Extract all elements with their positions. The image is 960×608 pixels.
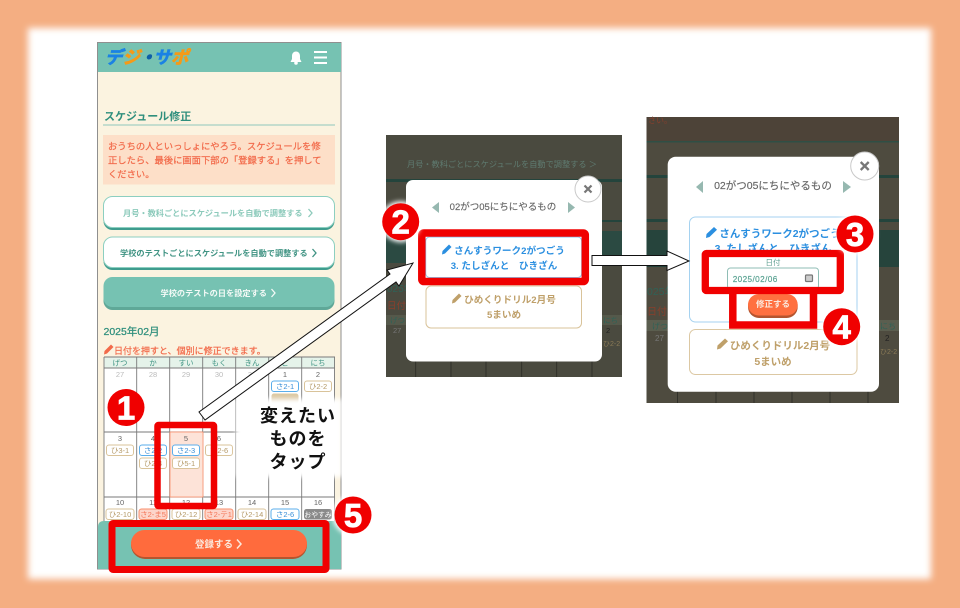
dimmed screenshot: にち — [880, 322, 896, 331]
week 3: さ2-テ1 — [206, 510, 232, 519]
notice box: ください。 — [108, 170, 154, 180]
callout: tap what you want to change: ものを — [270, 429, 326, 449]
week 3: 13 — [215, 498, 223, 507]
week 3: 12 — [182, 498, 190, 507]
week 2: ひ2-6 — [210, 446, 228, 455]
footer bar — [98, 521, 341, 569]
callout: tap what you want to change: 変えたい — [260, 406, 336, 426]
week 1: 31 — [248, 370, 256, 379]
dimmed screenshot: げつ — [652, 322, 668, 331]
icon: menu — [314, 51, 327, 64]
week 2: さ2-2 — [144, 446, 162, 455]
week 1: 2 — [316, 370, 320, 379]
card: daily drill: 5まいめ — [754, 356, 792, 368]
card: math workbook — [426, 237, 582, 278]
week 3: 15 — [281, 498, 289, 507]
button: set test date: 学校のテストの日を設定する — [160, 288, 267, 298]
arrow: calendar to modal — [199, 263, 413, 420]
step marker 4 — [821, 306, 862, 347]
date input: 2025/02/06 — [733, 275, 778, 284]
highlight: date input — [705, 254, 840, 290]
step marker 4: 4 — [833, 309, 852, 346]
panel: modal steps 3 and 4 — [646, 116, 899, 403]
week 2: さ2-3 — [177, 446, 195, 455]
app logo: デジ・サポ — [104, 47, 193, 67]
heading: schedule edit: スケジュール修正 — [104, 109, 191, 123]
week 2: 5 — [184, 434, 188, 443]
button: register: 登録する — [195, 538, 233, 550]
highlight: date cell — [158, 425, 214, 506]
phone body — [98, 42, 341, 569]
highlight: math card — [422, 233, 585, 282]
button: register — [131, 530, 307, 559]
week 1: ひ2-2 — [309, 382, 327, 391]
card: math workbook: さんすうワーク2がつごう — [454, 245, 565, 257]
card: math workbook expanded — [690, 217, 857, 322]
dimmed screenshot — [646, 116, 899, 403]
month label: 2025年02月 — [104, 325, 160, 338]
calendar — [104, 357, 335, 521]
dimmed screenshot: ひ2-2 — [880, 348, 897, 356]
selected day highlight — [170, 432, 203, 497]
date navigation: 02がつ05にちにやるもの — [450, 201, 556, 213]
weekday header — [104, 357, 335, 368]
week 3: 14 — [248, 498, 256, 507]
week 3: ひ2-10 — [109, 510, 131, 519]
week 1: 29 — [182, 370, 190, 379]
date field label: 日付 — [766, 257, 781, 267]
highlight: save button — [733, 290, 814, 325]
step marker 2: 2 — [392, 204, 410, 241]
week 1: さ2-1 — [276, 382, 294, 391]
dimmed screenshot: にち — [603, 316, 618, 325]
dimmed screenshot: 日付 — [647, 305, 667, 318]
dimmed screenshot — [386, 135, 622, 377]
weekday header: すい — [178, 358, 194, 368]
week 1: 1 — [283, 370, 287, 379]
week 3 — [106, 498, 332, 520]
week 2: 3 — [118, 434, 122, 443]
card: math workbook expanded: 3. たしざんと ひきざん — [715, 242, 832, 255]
week 1: 27 — [116, 370, 124, 379]
week 2: ひ3-1 — [111, 446, 129, 455]
step marker 3: 3 — [846, 216, 864, 253]
dimmed screenshot: 2 — [885, 334, 890, 343]
button: adjust by school test: 学校のテストごとにスケジュールを自動で調整する — [120, 248, 308, 258]
week 2: ひ5-1 — [177, 459, 195, 468]
week 1: 30 — [215, 370, 223, 379]
week 2 — [106, 434, 232, 468]
button: adjust by month and subject — [104, 196, 334, 230]
close button — [575, 176, 601, 202]
step marker 2 — [380, 201, 421, 242]
button: adjust by month and subject: 月号・教科ごとにスケジュールを自動で調整する — [123, 208, 303, 218]
date navigation — [432, 201, 575, 213]
week 1: 28 — [149, 370, 157, 379]
date navigation: 02がつ05にちにやるもの — [714, 179, 832, 192]
dimmed screenshot: 27 — [393, 326, 401, 335]
week 3: さ2-ま5 — [140, 510, 166, 519]
card: daily drill: ひめくりドリル2月号 — [730, 340, 830, 352]
dimmed screenshot: 2 — [606, 326, 610, 335]
modal card — [668, 157, 879, 392]
arrow: modal to edit form — [592, 251, 689, 270]
dimmed screenshot: 日付 — [387, 301, 407, 312]
step marker 1 — [108, 389, 144, 426]
week 2: 4 — [151, 434, 155, 443]
week 2: ひ2-4 — [144, 459, 162, 468]
week 3: 16 — [314, 498, 322, 507]
card: math workbook: 3. たしざんと ひきざん — [451, 260, 558, 272]
dimmed screenshot: 月号・教科ごとにスケジュールを自動で調整する ＞ — [407, 159, 597, 169]
button: save edit: 修正する — [756, 299, 790, 309]
notice box — [103, 135, 335, 184]
icon: bell — [290, 52, 302, 65]
close button — [851, 152, 879, 180]
step marker 5: 5 — [344, 497, 362, 534]
dimmed screenshot: 27 — [655, 334, 664, 343]
week 3: ひ2-14 — [241, 510, 263, 519]
callout: tap what you want to change — [236, 399, 342, 477]
weekday header: か — [149, 358, 157, 368]
date input — [728, 268, 818, 289]
step marker 5 — [332, 494, 374, 536]
highlight: register button — [112, 524, 326, 570]
dimmed screenshot: さい。 — [648, 116, 672, 125]
card: daily drill — [426, 286, 582, 328]
button: set test date — [104, 277, 334, 310]
weekday header: ど — [281, 358, 289, 368]
button: save edit — [748, 294, 798, 318]
weekday header: もく — [212, 358, 226, 368]
app header bar — [98, 43, 341, 72]
week 3: 10 — [116, 498, 124, 507]
week 2: 6 — [217, 434, 221, 443]
dimmed screenshot: 025年 — [387, 282, 414, 295]
weekday header: きん — [244, 358, 260, 368]
card: math workbook expanded: さんすうワーク2がつごう — [719, 227, 841, 240]
weekday header: にち — [310, 358, 326, 368]
panel: modal step 2 — [386, 135, 622, 377]
notice box: 正したら、最後に画面下部の「登録する」を押して — [108, 154, 322, 166]
card: daily drill: 5まいめ — [487, 310, 521, 321]
week 3: さ2-6 — [276, 510, 294, 519]
modal card — [406, 180, 602, 362]
dimmed screenshot: げつ — [390, 316, 405, 325]
panel: phone schedule screen — [98, 42, 341, 569]
callout: tap what you want to change: タップ — [270, 452, 326, 472]
dimmed screenshot: 025年 — [647, 285, 675, 298]
notice box: おうちの人といっしょにやろう。スケジュールを修 — [108, 140, 321, 152]
week 3: 11 — [149, 498, 157, 507]
button: adjust by school test — [104, 237, 334, 270]
step marker 1: 1 — [117, 390, 135, 426]
date navigation — [696, 179, 851, 193]
card: daily drill: ひめくりドリル2月号 — [464, 295, 556, 306]
week 1 — [116, 370, 332, 404]
calendar hint: 日付を押すと、個別に修正できます。 — [114, 345, 266, 356]
weekday header: げつ — [112, 358, 128, 368]
week 3: ひ2-12 — [175, 510, 197, 519]
week 3: おやすみ — [304, 511, 332, 519]
card: daily drill — [690, 330, 857, 374]
step marker 3 — [834, 214, 876, 254]
dimmed screenshot: ひ2-2 — [603, 340, 620, 348]
